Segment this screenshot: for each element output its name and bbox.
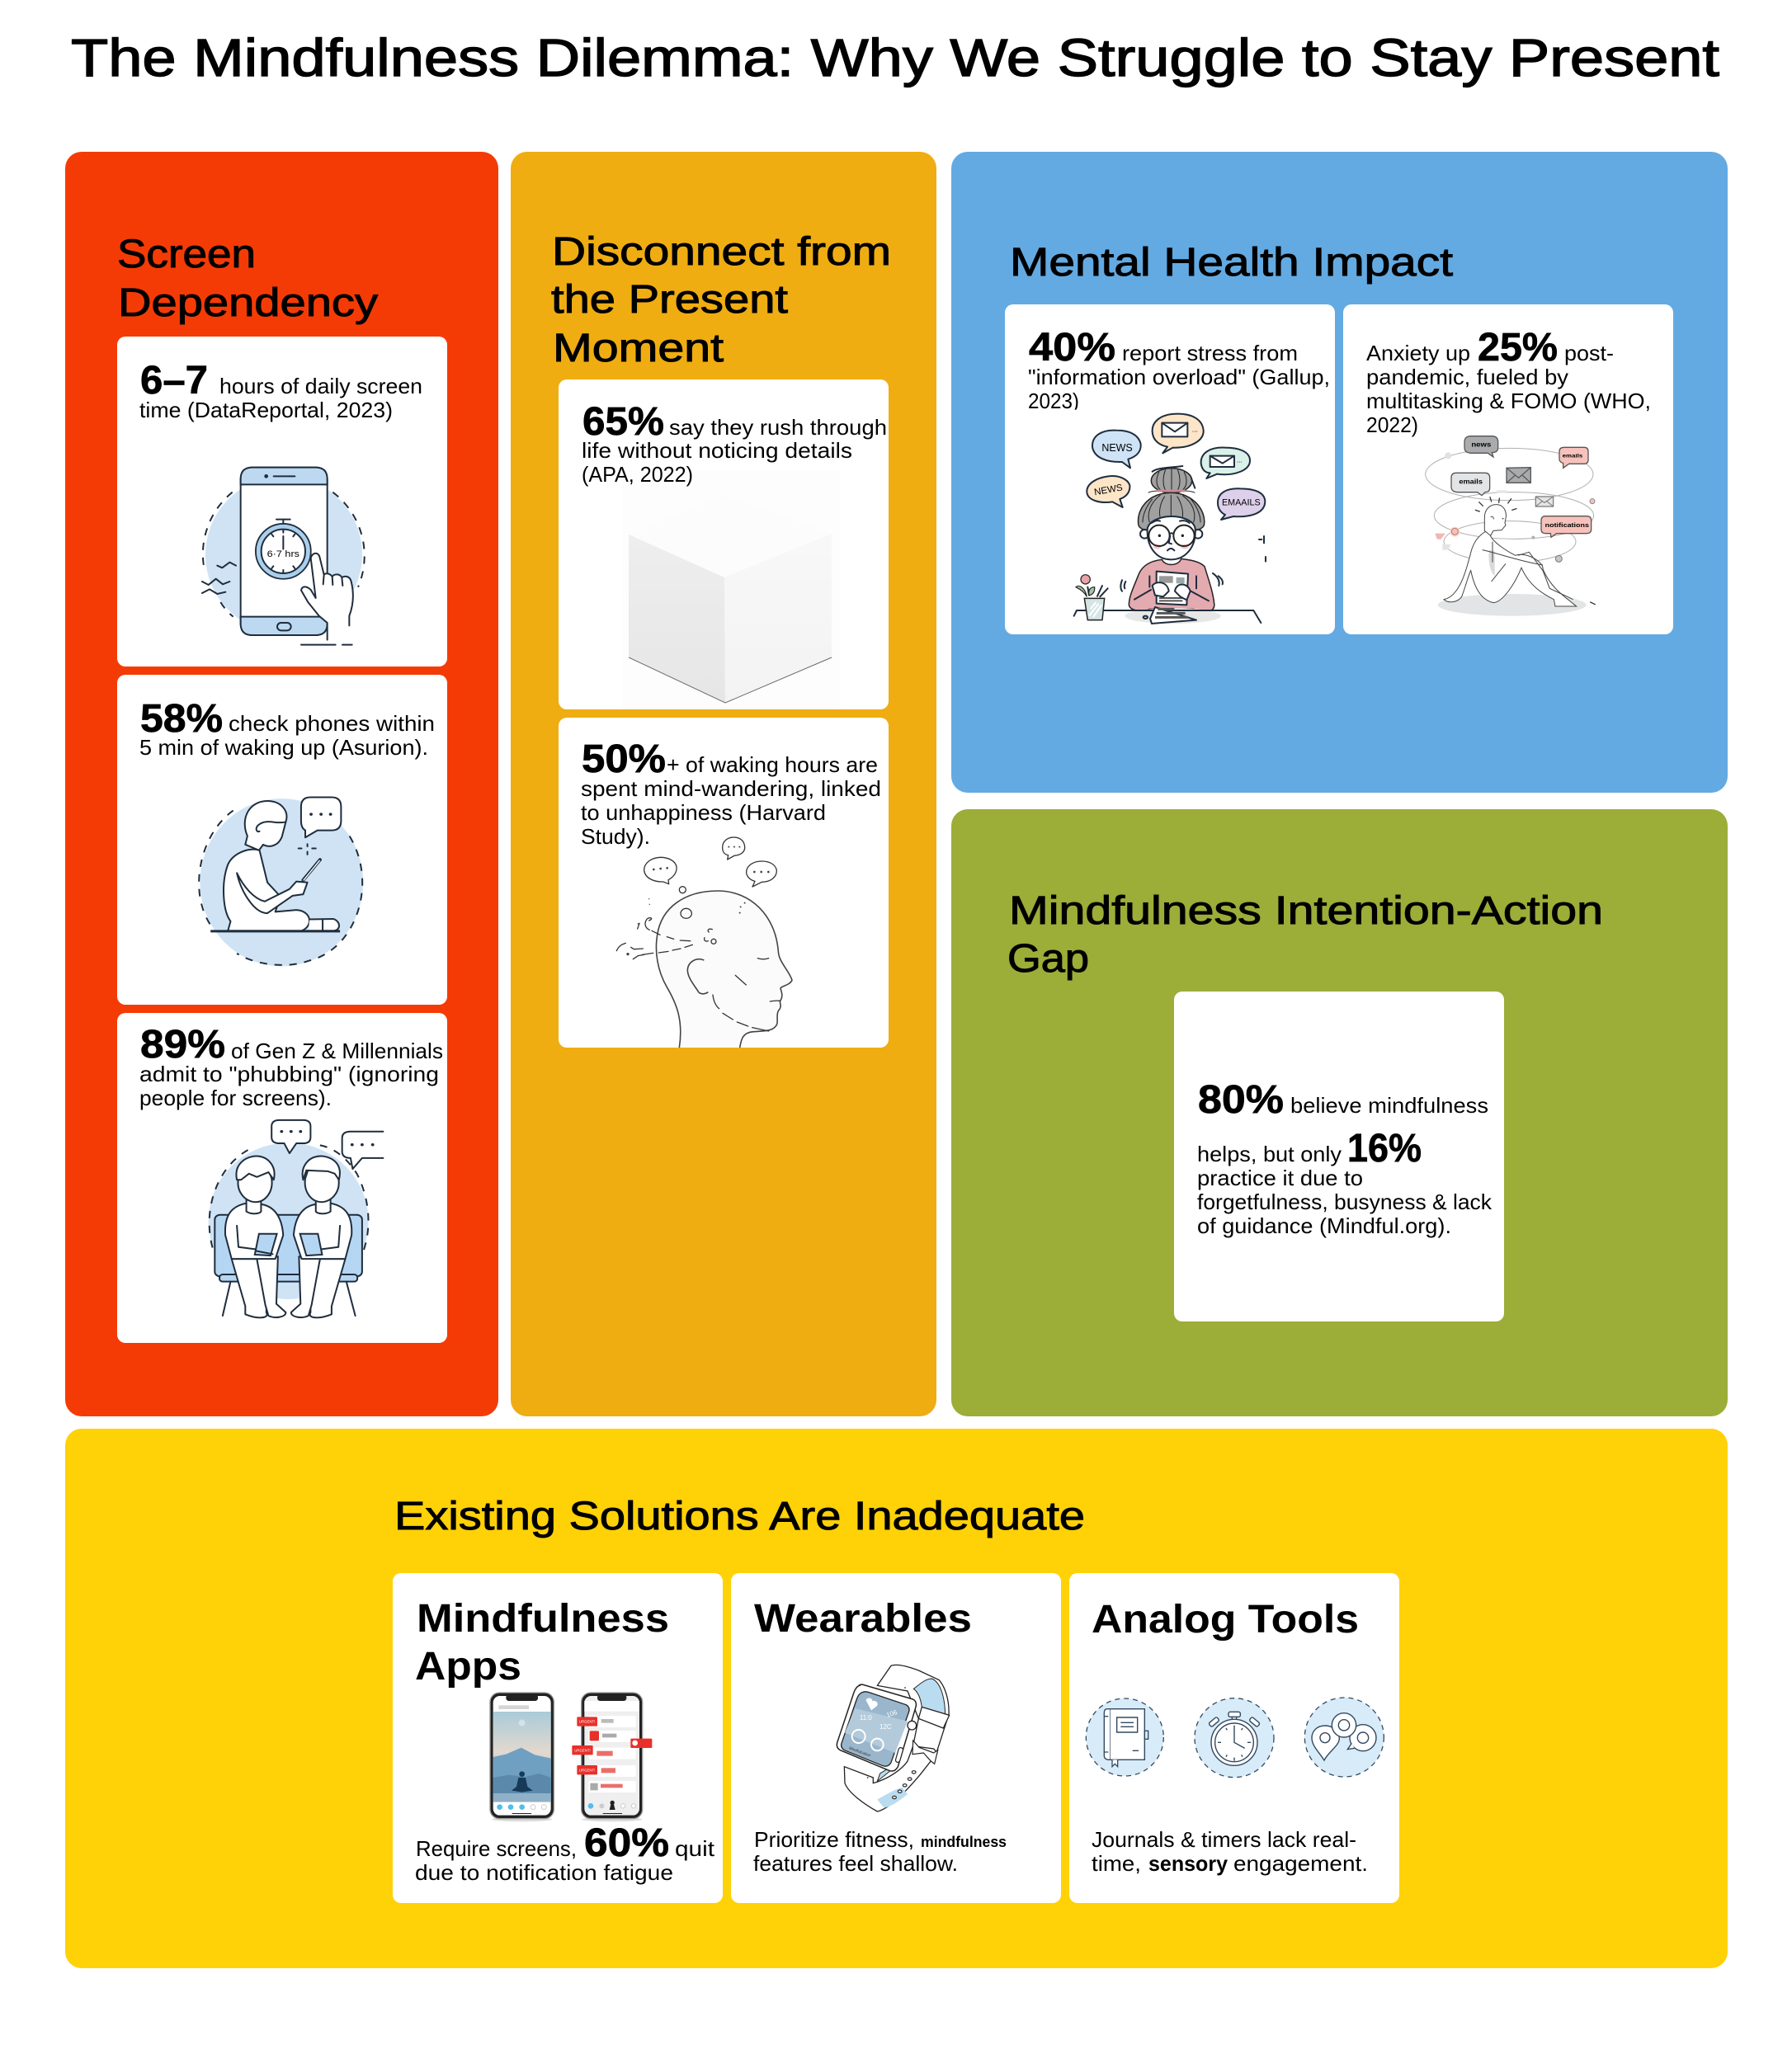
card: analog tools: sensory — [1148, 1851, 1228, 1876]
icon: smartwatch: 12C — [879, 1723, 892, 1731]
icon: overwhelmed woman with speech bubbles: ... — [1192, 425, 1198, 433]
icon: stopwatch — [1195, 1698, 1274, 1778]
card: anxiety — [1343, 304, 1673, 634]
heading: intention-action gap: Mindfulness Intention-Action — [1009, 889, 1603, 933]
card: mindfulness apps: Apps — [415, 1645, 521, 1689]
heading: disconnect: Disconnect from — [552, 230, 891, 274]
icon: two people on phones — [209, 1120, 383, 1317]
icon: person surrounded by notifications: news — [1471, 441, 1492, 449]
card: wearables — [731, 1573, 1061, 1903]
card: mind-wandering: Study). — [581, 824, 650, 849]
card: belief vs practice: 80% — [1198, 1078, 1284, 1122]
card: anxiety: pandemic, fueled by — [1366, 365, 1568, 389]
icon: person surrounded by notifications — [1426, 436, 1595, 616]
heading: disconnect — [551, 230, 891, 370]
icon: phone with stopwatch: 6·7 hrs — [267, 549, 299, 559]
card: mindfulness apps: quit — [675, 1836, 715, 1861]
card: morning phone checks: check phones within — [229, 711, 435, 736]
card: information overload: "information overload" (Gallup, — [1028, 365, 1330, 389]
card: mind-wandering: + of waking hours are — [667, 752, 878, 777]
heading: screen dependency: Dependency — [118, 281, 378, 325]
card: wearables: Wearables — [754, 1597, 972, 1641]
card: daily screen time — [117, 337, 447, 667]
heading: disconnect: Moment — [553, 327, 724, 370]
card: mindfulness apps: Mindfulness — [417, 1597, 669, 1641]
card: belief vs practice: practice it due to — [1197, 1166, 1363, 1190]
icon: person using phone — [199, 797, 363, 966]
panel: disconnect from the present moment — [511, 152, 936, 1416]
card: analog tools — [1069, 1573, 1399, 1903]
card: analog tools: engagement. — [1233, 1851, 1368, 1876]
card: mindfulness apps: due to notification fatigue — [415, 1860, 673, 1885]
card: phubbing: people for screens). — [139, 1086, 332, 1110]
card: wearables: mindfulness — [921, 1834, 1007, 1850]
card: anxiety: 25% — [1478, 326, 1558, 370]
card: rushing through life: (APA, 2022) — [582, 462, 693, 487]
icon: overwhelmed woman with speech bubbles: EMAAILS — [1222, 498, 1261, 508]
card: mindfulness apps: Require screens, — [416, 1836, 577, 1861]
icon: overwhelmed woman with speech bubbles: NEWS — [1101, 442, 1133, 454]
card: anxiety: post- — [1564, 341, 1614, 365]
card: belief vs practice: believe mindfulness — [1290, 1093, 1488, 1118]
heading: intention-action gap — [1007, 889, 1603, 981]
card: information overload: 40% — [1029, 326, 1115, 370]
card: daily screen time: time (DataReportal, 2023) — [139, 398, 393, 422]
icon: two phone screens: URGENT! — [574, 1748, 591, 1752]
icon: person surrounded by notifications: notifications — [1545, 521, 1589, 529]
panel: mental health impact — [951, 152, 1728, 793]
card: belief vs practice: forgetfulness, busyness & lack — [1197, 1189, 1493, 1214]
card: phubbing — [117, 1013, 447, 1343]
heading: existing solutions: Existing Solutions Are Inadequate — [394, 1495, 1085, 1538]
card: mind-wandering: to unhappiness (Harvard — [581, 800, 826, 825]
panel: mindfulness intention-action gap — [951, 809, 1728, 1416]
image: white cube — [622, 470, 840, 709]
card: belief vs practice: 16% — [1347, 1127, 1422, 1171]
card: analog tools: Analog Tools — [1092, 1598, 1359, 1642]
icon: overwhelmed woman with speech bubbles: ... — [1237, 457, 1243, 464]
card: anxiety: multitasking & FOMO (WHO, — [1366, 389, 1651, 413]
heading: intention-action gap: Gap — [1007, 937, 1089, 981]
icon: smartwatch: Mindfulcation — [848, 1746, 871, 1758]
icon: head with wandering thoughts — [616, 837, 792, 1048]
card: information overload — [1005, 304, 1335, 634]
heading: screen dependency — [117, 233, 378, 325]
icon: two phone screens: URGENT! — [579, 1720, 595, 1724]
card: mindfulness apps: 60% — [584, 1821, 669, 1865]
card: morning phone checks: 5 min of waking up (Asurion). — [139, 735, 428, 760]
card: daily screen time: 6–7 — [140, 359, 208, 403]
heading: disconnect: the Present — [551, 278, 788, 322]
icon: smartwatch: 106 — [885, 1708, 898, 1719]
card: belief vs practice: of guidance (Mindful.org). — [1197, 1213, 1451, 1238]
icon: smartwatch — [837, 1665, 950, 1811]
icon: smartwatch: 11:0 — [860, 1714, 872, 1722]
card: morning phone checks: 58% — [140, 697, 223, 741]
icon: overwhelmed woman with speech bubbles — [1073, 410, 1268, 629]
icon: overwhelmed woman with speech bubbles: NEWS — [1093, 483, 1124, 497]
icon: two phone screens — [490, 1693, 652, 1821]
icon: person surrounded by notifications: emails — [1459, 477, 1483, 485]
icon: person surrounded by notifications: emails — [1563, 453, 1583, 459]
icon: two phone screens: URGENT! — [579, 1768, 595, 1772]
icon: journal — [1086, 1698, 1163, 1776]
card: rushing through life: 65% — [582, 400, 664, 444]
card: mind-wandering — [559, 718, 889, 1048]
card: phubbing: admit to "phubbing" (ignoring — [139, 1062, 439, 1086]
title: The Mindfulness Dilemma: Why We Struggle to Stay Present — [71, 28, 1719, 87]
icon: phone with stopwatch — [202, 468, 365, 645]
card: analog tools: Journals & timers lack real- — [1092, 1827, 1356, 1852]
card: belief vs practice — [1174, 992, 1504, 1321]
card: information overload: report stress from — [1122, 341, 1298, 365]
card: phubbing: of Gen Z & Millennials — [231, 1039, 443, 1063]
heading: screen dependency: Screen — [117, 233, 256, 276]
card: rushing through life — [559, 379, 889, 709]
card: anxiety: 2022) — [1366, 412, 1418, 437]
card: daily screen time: hours of daily screen — [219, 374, 422, 398]
card: rushing through life: say they rush through — [669, 415, 887, 440]
card: wearables: features feel shallow. — [753, 1851, 958, 1876]
card: wearables: Prioritize fitness, — [754, 1827, 914, 1852]
heading: mental health impact: Mental Health Impact — [1010, 241, 1453, 285]
card: belief vs practice: helps, but only — [1197, 1142, 1342, 1166]
card: rushing through life: life without noticing details — [582, 438, 852, 463]
card: analog tools: time, — [1092, 1851, 1141, 1876]
card: mindfulness apps — [393, 1573, 723, 1903]
card: anxiety: Anxiety up — [1366, 341, 1470, 365]
card: information overload: 2023) — [1028, 389, 1079, 413]
panel: existing solutions — [65, 1429, 1728, 1968]
card: phubbing: 89% — [140, 1023, 225, 1067]
card: morning phone checks — [117, 675, 447, 1005]
card: mind-wandering: spent mind-wandering, linked — [581, 776, 881, 801]
card: mind-wandering: 50% — [582, 737, 666, 781]
panel: screen dependency — [65, 152, 498, 1416]
icon: location speech bubbles — [1304, 1698, 1384, 1777]
